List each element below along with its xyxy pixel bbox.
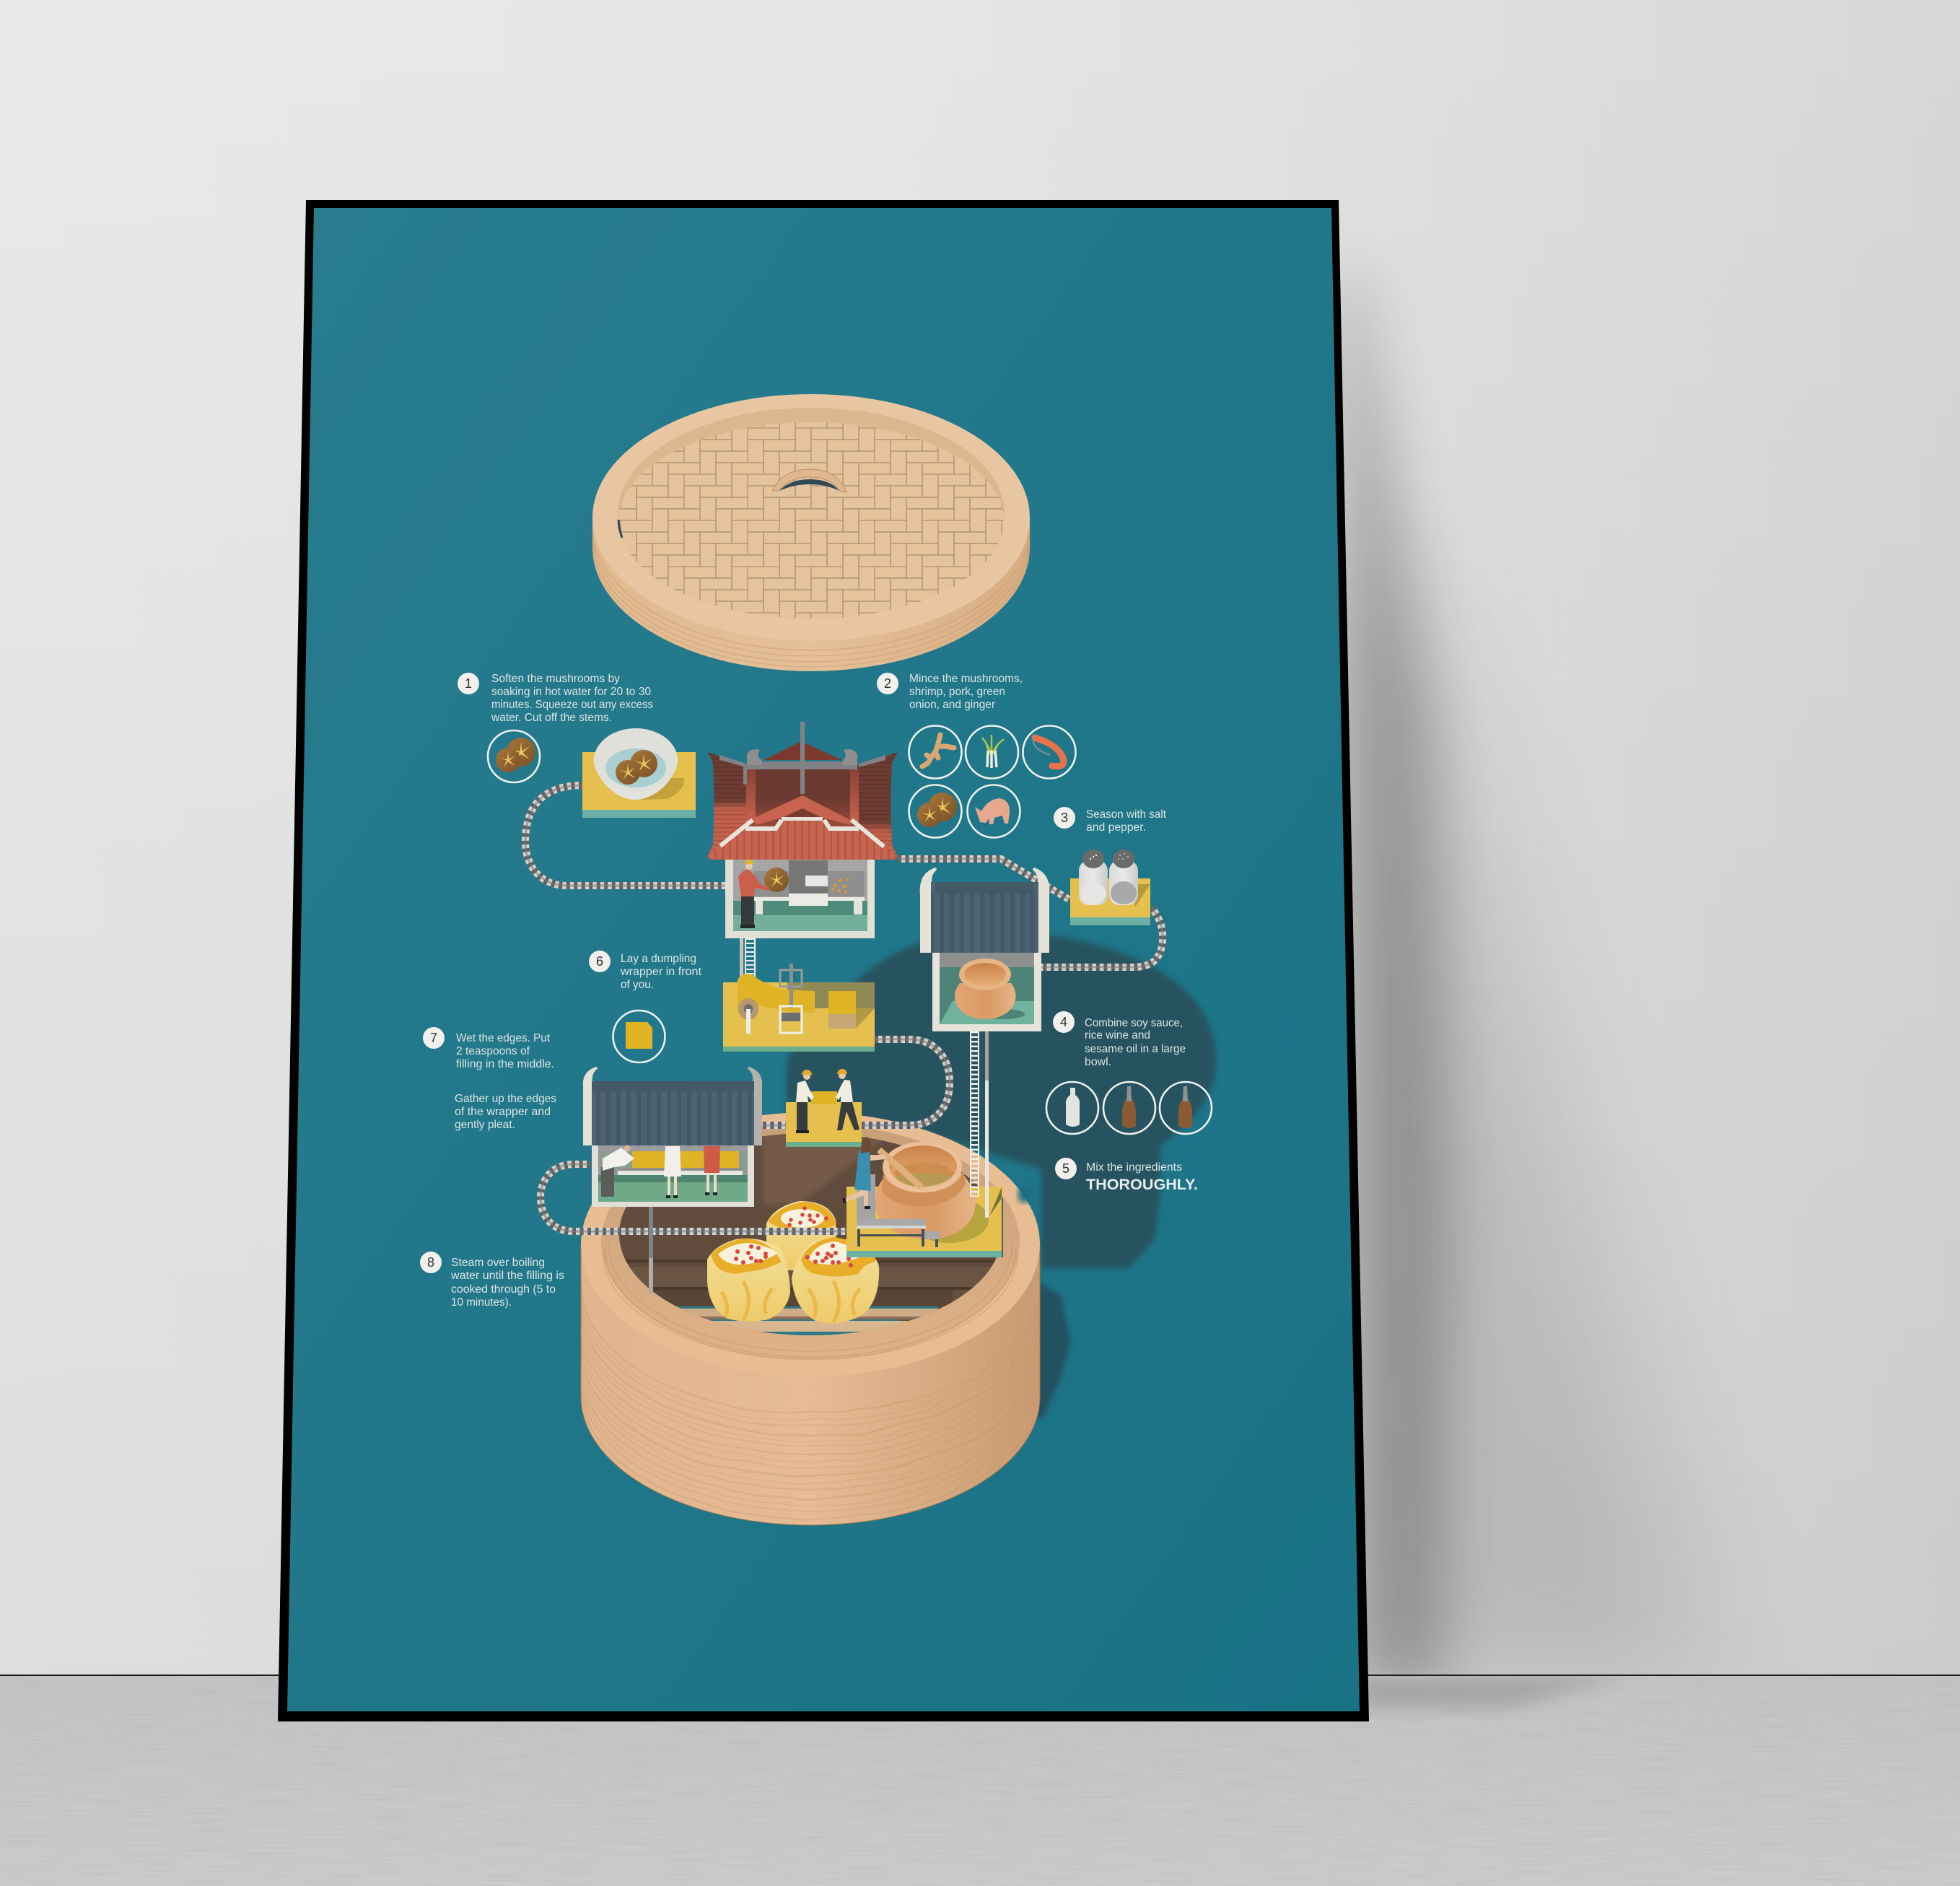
step 2 shrimp icon — [1023, 726, 1075, 778]
step 6 caption: 6 — [596, 954, 603, 969]
step 7 caption: Wet the edges. Put — [456, 1032, 551, 1044]
yellow plate — [846, 1187, 1002, 1251]
poster shadow on wall — [1339, 274, 1718, 1689]
conveyor rail: workshop to steamer — [541, 1164, 846, 1231]
room walls — [592, 1145, 754, 1207]
large cast shadow — [787, 933, 1216, 1268]
yellow plate — [1070, 878, 1150, 917]
step 4 brown bottle icon — [1103, 1082, 1155, 1134]
green back wall — [598, 1175, 748, 1182]
plate edge — [723, 1047, 875, 1052]
step 3 caption: and pepper. — [1086, 821, 1146, 834]
right roof wing — [859, 752, 898, 857]
step 2 green onion icon — [966, 726, 1018, 778]
back dumpling — [766, 1201, 837, 1270]
step 4 white bottle icon — [1046, 1082, 1098, 1134]
ladder from mincer to press — [740, 938, 756, 978]
step 5 caption — [1055, 1158, 1198, 1193]
front left dumpling — [707, 1239, 790, 1322]
yellow plate — [582, 752, 696, 810]
step 8 caption: cooked through (5 to — [451, 1283, 556, 1296]
workers carrying wrapper station — [786, 1069, 862, 1147]
dough press station — [723, 964, 875, 1052]
bowl shadow — [635, 778, 684, 800]
room back — [733, 859, 867, 901]
white roof trim — [720, 820, 884, 847]
gable white strip — [782, 817, 823, 821]
roof back panels — [746, 765, 859, 827]
small light gap in cast shadow — [1018, 1184, 1034, 1203]
conveyor rail: seasoning to bowl — [1041, 908, 1163, 967]
base interior details — [613, 1131, 996, 1335]
white bowl — [594, 728, 678, 800]
step 2 pig icon — [967, 785, 1020, 837]
mixing pot station — [843, 1137, 1003, 1257]
step 4 caption: bowl. — [1085, 1056, 1111, 1068]
step 3 caption: Season with salt — [1086, 808, 1167, 821]
roof back gable — [764, 741, 842, 760]
steamer side shadow — [1032, 1278, 1071, 1418]
bench — [857, 1174, 940, 1247]
right post — [1033, 868, 1049, 953]
step 4 caption — [1053, 1011, 1186, 1068]
worker in red jumper — [738, 860, 769, 928]
woman in red dress — [704, 1146, 720, 1195]
step 7 caption: of the wrapper and — [455, 1106, 551, 1118]
woman in blue dress — [843, 1137, 886, 1209]
step 4 caption: Combine soy sauce, — [1085, 1017, 1183, 1029]
salt shaker — [1079, 850, 1108, 905]
step 6 wrapper icon — [613, 1010, 665, 1062]
filling workshop: step 7 — [583, 1067, 762, 1207]
shaker shadow — [1134, 884, 1150, 908]
poster frame — [278, 200, 1369, 1721]
right post — [748, 1067, 762, 1145]
base body — [581, 1244, 1040, 1525]
step 1 caption: Soften the mushrooms by — [491, 673, 620, 685]
grey roof frame — [719, 722, 885, 794]
yellow plate — [723, 982, 875, 1047]
step 8 caption: Steam over boiling — [451, 1257, 545, 1269]
room interior — [940, 953, 1034, 1024]
green floor — [598, 1182, 748, 1202]
red pillars — [746, 769, 756, 823]
floor line — [0, 1675, 1960, 1676]
step 5 caption: 5 — [1062, 1161, 1069, 1176]
plate side line — [1002, 1198, 1003, 1257]
support pole under workshop — [649, 1207, 653, 1293]
dough sheet and box — [828, 991, 856, 1029]
step 3 seasoning station — [1070, 850, 1150, 925]
step 8 caption: 8 — [427, 1255, 434, 1270]
step 2 mushroom icon — [909, 785, 961, 837]
lid rim — [592, 394, 1030, 641]
step 3 caption: 3 — [1061, 811, 1068, 825]
step 5 caption: Mix the ingredients — [1086, 1161, 1182, 1174]
room interior — [598, 1145, 748, 1182]
step 1 caption — [458, 673, 653, 724]
floor — [0, 1676, 1960, 1886]
step 4 caption: 4 — [1060, 1015, 1067, 1029]
step 7 caption: filling in the middle. — [456, 1058, 554, 1070]
roller wheel — [738, 998, 758, 1034]
poster teal surface — [287, 208, 1360, 1711]
step 7 caption: Gather up the edges — [455, 1093, 556, 1105]
base wood grain — [581, 1285, 1040, 1519]
bamboo steamer lid — [592, 394, 1030, 671]
front right dumpling — [792, 1237, 879, 1324]
bowl house: step 4 — [920, 868, 1049, 1031]
left post — [583, 1067, 598, 1145]
mincing machine — [754, 860, 865, 914]
large clay pot — [875, 1142, 976, 1239]
inner gable recess — [782, 808, 823, 820]
wooden spoon — [879, 1150, 922, 1187]
conveyor rail: press to workers — [763, 1039, 950, 1125]
lid side wall — [592, 518, 1030, 671]
ladder from bowl house to mixing pot — [970, 1031, 979, 1197]
pepper shaker — [1109, 850, 1138, 905]
step 7 caption — [423, 1027, 556, 1131]
left post — [920, 868, 937, 953]
step 6 caption — [589, 951, 702, 991]
step 1 caption: 1 — [465, 676, 472, 691]
step 7 caption: 7 — [430, 1031, 437, 1045]
step 8 caption: 10 minutes). — [451, 1296, 512, 1309]
press frame — [780, 964, 802, 1033]
step 6 caption: wrapper in front — [620, 966, 702, 978]
wrapper sheet — [811, 1091, 837, 1104]
plate edge — [1070, 917, 1150, 925]
step 6 caption: of you. — [621, 979, 654, 991]
step 1 caption: minutes. Squeeze out any excess — [491, 699, 653, 711]
base inner ledge — [601, 1124, 1020, 1361]
step 6 caption: Lay a dumpling — [621, 953, 696, 965]
step 4 caption: rice wine and — [1085, 1029, 1150, 1042]
conveyor rail: mincer to seasoning — [898, 859, 1070, 900]
gable chevron — [754, 795, 852, 825]
room walls — [725, 859, 875, 938]
conveyor rail: step 1 to mincer — [525, 785, 725, 886]
step 7 caption: 2 teaspoons of — [456, 1045, 530, 1057]
step 2 caption: 2 — [884, 676, 891, 691]
lid handle — [772, 469, 846, 492]
plate edge — [786, 1142, 862, 1147]
front roof — [707, 821, 898, 860]
step 1 caption: soaking in hot water for 20 to 30 — [491, 686, 651, 698]
step 4 brown bottle icon — [1160, 1082, 1212, 1134]
right worker — [836, 1069, 859, 1130]
base rim — [581, 1112, 1040, 1376]
clay pot — [955, 959, 1015, 1019]
support pole — [985, 1031, 989, 1218]
step 2 caption: shrimp, pork, green — [909, 686, 1005, 698]
step 1 caption: water. Cut off the stems. — [491, 712, 612, 724]
soaking station: step 1 — [582, 728, 696, 818]
slate roof — [931, 882, 1038, 953]
ledge grain — [603, 1243, 1018, 1359]
lid inner wall — [618, 408, 1005, 619]
dough conveyor shape — [738, 974, 815, 1013]
step 2 ginger icon — [909, 726, 961, 778]
machine shadow — [787, 982, 875, 1008]
man bending over table — [601, 1145, 634, 1197]
slate roof — [592, 1081, 754, 1145]
step 3 caption — [1054, 807, 1167, 834]
green back wall — [733, 901, 867, 915]
mincing house with red roof — [707, 722, 898, 938]
step 8 caption: water until the filling is — [450, 1270, 564, 1282]
step 2 caption — [877, 673, 1023, 711]
floor grain — [0, 1676, 1960, 1886]
green floor — [940, 1001, 1034, 1024]
yellow wrapper on table — [632, 1151, 739, 1169]
step 4 caption: sesame oil in a large — [1085, 1043, 1186, 1055]
step 2 caption: onion, and ginger — [909, 699, 995, 711]
lid woven mat — [618, 422, 1004, 619]
floor shadow — [981, 1009, 1025, 1019]
woman in white dress — [664, 1146, 681, 1198]
step 5 caption: THOROUGHLY. — [1086, 1176, 1198, 1193]
dumplings — [707, 1201, 879, 1324]
plate edge — [582, 810, 696, 818]
bamboo steamer base — [581, 1112, 1040, 1525]
poster shadow on floor — [1357, 1676, 1631, 1709]
base interior — [619, 1133, 1002, 1335]
left worker — [796, 1070, 814, 1133]
work table — [618, 1168, 743, 1171]
step 2 caption: Mince the mushrooms, — [909, 673, 1023, 685]
plate edge — [846, 1251, 1002, 1257]
step 7 caption: gently pleat. — [455, 1119, 515, 1131]
room walls — [932, 953, 1041, 1031]
yellow plate — [786, 1102, 862, 1142]
step 8 caption — [420, 1252, 564, 1309]
step 1 mushroom icon — [488, 730, 540, 782]
green floor — [733, 915, 867, 931]
plate corner shade — [989, 1187, 1002, 1216]
pot shadow — [909, 1197, 989, 1243]
left roof wing — [707, 752, 746, 857]
